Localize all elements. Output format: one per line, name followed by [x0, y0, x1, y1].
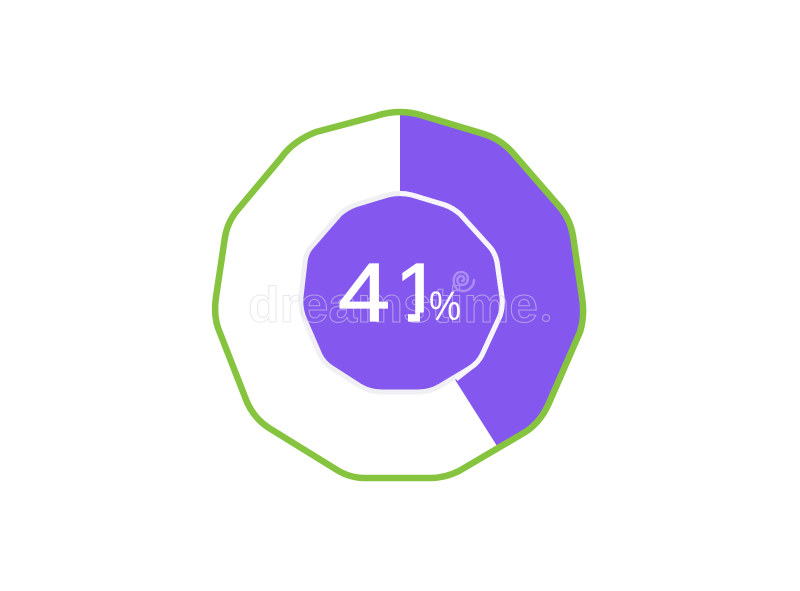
value label 41: [339, 263, 424, 322]
white progress ring on inner polygon: [400, 194, 502, 379]
percent sign: %: [429, 283, 461, 329]
chart: 41 percent polygon donut gauge: [212, 108, 586, 482]
watermark spiral icon: [454, 272, 474, 291]
green outer polygon outline: [215, 112, 583, 478]
value label 41: 1: [395, 246, 441, 339]
watermark: dreamstime: [248, 277, 538, 333]
watermark registered mark: [542, 314, 550, 322]
inner purple polygon with grey ring: [301, 194, 502, 392]
purple 41 percent segment: [400, 115, 580, 446]
value label 41: 4: [338, 246, 390, 339]
